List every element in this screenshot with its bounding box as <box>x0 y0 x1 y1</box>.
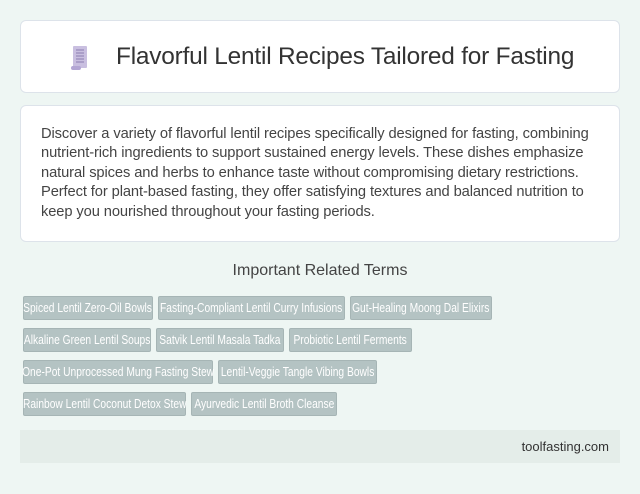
tag: One-Pot Unprocessed Mung Fasting Stew <box>22 365 214 379</box>
icon: scroll <box>71 46 87 70</box>
tag <box>23 392 186 416</box>
description text: Discover a variety of flavorful lentil recipes specifically designed for fasting, combining <box>41 126 589 142</box>
header card <box>20 20 620 93</box>
title: Flavorful Lentil Recipes Tailored for Fasting <box>116 43 574 70</box>
description text: natural spices and herbs to enhance taste without compromising dietary restrictions. <box>41 165 579 181</box>
description card <box>20 105 620 242</box>
description text: nutrient-rich ingredients to support sustained energy levels. These dishes emphasize <box>41 145 583 161</box>
tag <box>156 328 284 352</box>
tag: Ayurvedic Lentil Broth Cleanse <box>194 397 334 411</box>
tag <box>23 360 213 384</box>
tag: Fasting-Compliant Lentil Curry Infusions <box>160 301 343 315</box>
tag <box>350 296 492 320</box>
tag: Rainbow Lentil Coconut Detox Stew <box>23 397 186 411</box>
description text: Perfect for plant-based fasting, they offer satisfying textures and balanced nutrition to <box>41 184 584 200</box>
tag <box>191 392 337 416</box>
description text <box>41 126 589 220</box>
tag <box>23 328 151 352</box>
tag <box>158 296 345 320</box>
footer <box>20 430 620 463</box>
tag: Spiced Lentil Zero-Oil Bowls <box>24 301 152 315</box>
terms heading: Important Related Terms <box>233 262 407 279</box>
tag <box>218 360 377 384</box>
footer text: toolfasting.com <box>522 439 609 454</box>
tag: Lentil-Veggie Tangle Vibing Bowls <box>221 365 374 379</box>
tag <box>289 328 412 352</box>
description text: keep you nourished throughout your fasting periods. <box>41 204 375 220</box>
tag: Gut-Healing Moong Dal Elixirs <box>352 301 490 315</box>
tag: Alkaline Green Lentil Soups <box>24 333 150 347</box>
tag: Satvik Lentil Masala Tadka <box>159 333 281 347</box>
tag: Probiotic Lentil Ferments <box>294 333 407 347</box>
tag <box>23 296 153 320</box>
